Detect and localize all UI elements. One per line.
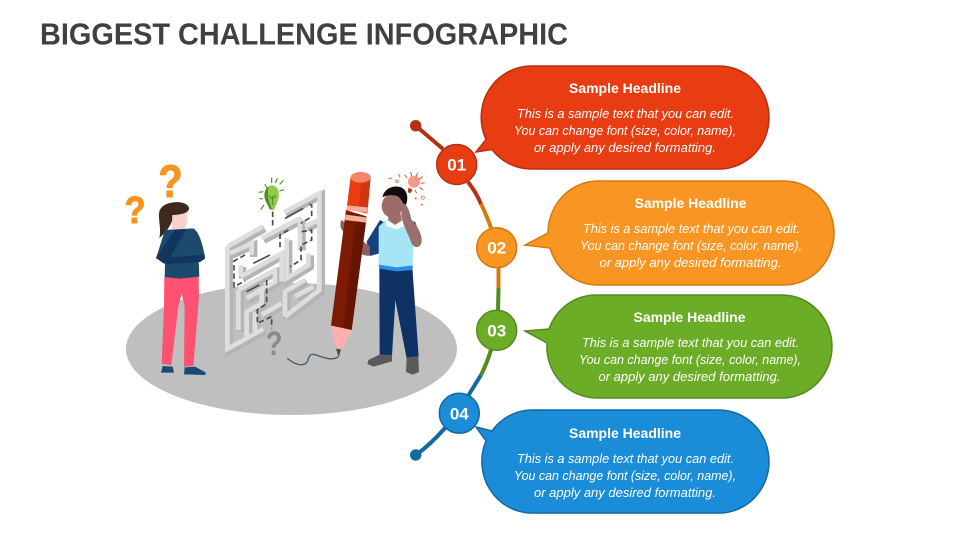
step 01 badge: 01 (447, 156, 466, 174)
icon: large orange question mark: ? (158, 157, 183, 207)
panel: callout 04: This is a sample text that you can edit. (517, 452, 734, 466)
step 02 badge: 02 (487, 238, 506, 258)
timeline end dot (410, 449, 421, 461)
icon: grey question mark: ? (266, 324, 282, 363)
panel: callout 04: or apply any desired formatting. (534, 486, 716, 500)
maze dashed route (234, 204, 312, 328)
step 03 badge (477, 310, 517, 350)
pants (162, 277, 199, 367)
timeline start dot (410, 120, 421, 131)
pencil (331, 172, 371, 357)
vest (379, 219, 413, 268)
panel: callout 02: Sample Headline (634, 195, 747, 211)
panel: callout 01: You can change font (size, color, name), (514, 124, 736, 138)
title: BIGGEST CHALLENGE INFOGRAPHIC (40, 18, 568, 52)
panel: callout 03: This is a sample text that you can edit. (582, 336, 799, 350)
panel: callout 01: This is a sample text that you can edit. (517, 107, 734, 121)
panel: callout 03 (525, 295, 832, 398)
panel: callout 01 (476, 66, 769, 169)
panel: callout 03: Sample Headline (634, 309, 746, 325)
waist band (379, 265, 413, 271)
panel: callout 04: You can change font (size, color, name), (514, 469, 736, 483)
neck and head (388, 210, 402, 225)
icon: small orange question mark: ? (125, 188, 145, 231)
collar (385, 218, 404, 229)
panel: callout 04 (476, 410, 769, 513)
shoes (367, 354, 419, 375)
panel: callout 02: or apply any desired formatting. (600, 256, 782, 270)
icon: green light bulb (259, 178, 284, 210)
panel: callout 01: Sample Headline (569, 80, 681, 96)
trousers (379, 267, 419, 358)
icon: red idea bulb (389, 172, 425, 205)
maze wall shadows (229, 195, 321, 351)
panel: callout 02 (525, 181, 834, 285)
illustration: man with pencil (287, 172, 425, 375)
step 04 badge: 04 (450, 404, 469, 424)
panel: callout 01: or apply any desired formatting. (534, 141, 716, 155)
left hand (340, 220, 348, 233)
step 03 badge: 03 (487, 322, 506, 340)
raised arm (401, 203, 422, 247)
illustration: woman (156, 202, 206, 375)
ground ellipse (126, 283, 457, 415)
step 02 badge (477, 228, 517, 268)
face (172, 212, 187, 230)
step 01 badge (437, 144, 477, 184)
panel: callout 03: or apply any desired formatting. (598, 370, 780, 384)
right sleeve (405, 222, 421, 236)
step 04 badge (439, 393, 479, 433)
panel: callout 02: You can change font (size, color, name), (580, 239, 802, 253)
hair (383, 186, 407, 206)
hair back (159, 202, 189, 238)
panel: callout 04: Sample Headline (569, 425, 681, 441)
sweater (156, 228, 205, 279)
illustration: maze (227, 178, 321, 351)
panel: callout 03: You can change font (size, color, name), (579, 353, 801, 367)
left sleeve and arm (367, 220, 386, 256)
scribble line (287, 354, 338, 365)
timeline connector (416, 126, 498, 455)
panel: callout 02: This is a sample text that you can edit. (583, 222, 800, 236)
arms (156, 230, 205, 264)
maze wall tops (227, 193, 319, 349)
shoes (161, 366, 206, 375)
